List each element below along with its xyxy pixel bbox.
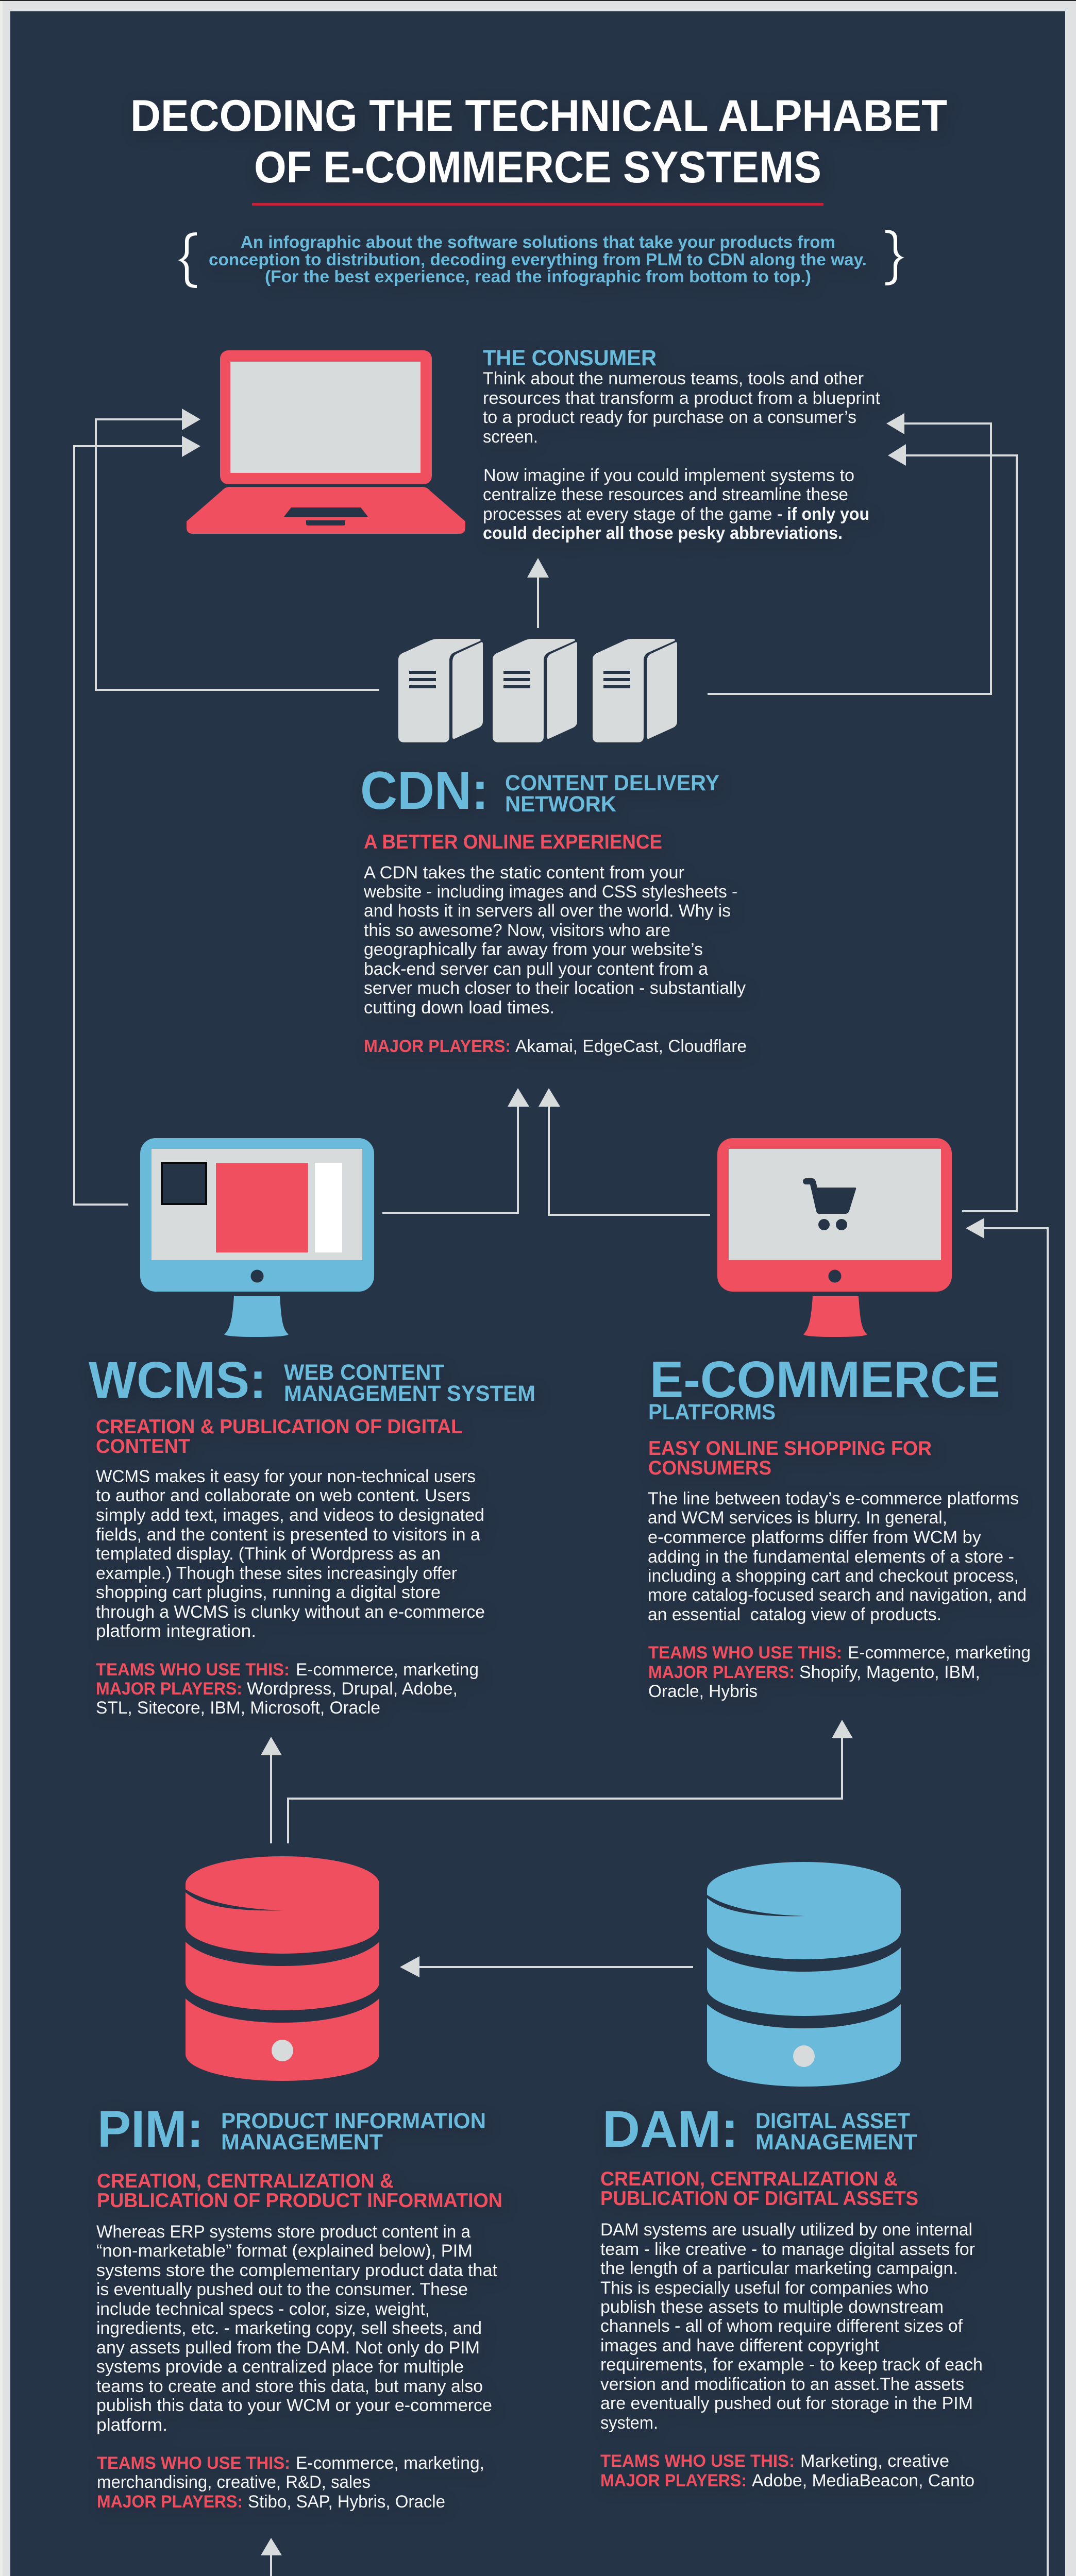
e-commerce body text: more catalog-focused search and navigation, and bbox=[648, 1585, 1027, 1605]
pim teams and players: merchandising, creative, R&D, sales bbox=[97, 2472, 371, 2492]
wcms body text: to author and collaborate on web content. Users bbox=[96, 1486, 470, 1505]
cdn body text: back-end server can pull your content from a bbox=[364, 959, 708, 979]
wcms body text bbox=[96, 1467, 485, 1641]
title bbox=[130, 91, 947, 192]
wcms body text: through a WCMS is clunky without an e-commerce bbox=[96, 1602, 485, 1622]
wcms teams and players: TEAMS WHO USE THIS: bbox=[96, 1660, 290, 1680]
arrow: wcms to cdn bbox=[382, 1088, 529, 1213]
dam body text: system. bbox=[600, 2413, 658, 2433]
intro text with braces bbox=[178, 230, 904, 288]
subheading: wcms: CREATION & PUBLICATION OF DIGITAL bbox=[96, 1416, 463, 1438]
heading: pim: MANAGEMENT bbox=[221, 2130, 383, 2155]
server 3 bbox=[593, 639, 677, 742]
e-commerce teams and players: E-commerce, marketing bbox=[848, 1643, 1031, 1663]
consumer body text: could decipher all those pesky abbreviations. bbox=[483, 523, 843, 543]
subheading: dam: CREATION, CENTRALIZATION & bbox=[600, 2168, 898, 2190]
cdn body text: this so awesome? Now, visitors who are bbox=[364, 921, 670, 940]
consumer body text: Think about the numerous teams, tools and other bbox=[483, 369, 864, 388]
arrow: pim to wcms bbox=[261, 1737, 282, 1843]
consumer body text: resources that transform a product from a blueprint bbox=[483, 388, 881, 408]
heading: pim: PIM: bbox=[97, 2100, 204, 2158]
heading: e-commerce platforms: E-COMMERCE bbox=[650, 1351, 1000, 1409]
heading: wcms bbox=[89, 1351, 535, 1409]
arrow: erp to e-commerce bbox=[648, 1218, 1048, 2576]
heading: pim: PRODUCT INFORMATION bbox=[221, 2109, 486, 2133]
pim teams and players: Stibo, SAP, Hybris, Oracle bbox=[248, 2492, 445, 2512]
e-commerce teams and players: TEAMS WHO USE THIS: bbox=[648, 1643, 842, 1663]
arrow: e-commerce to cdn bbox=[539, 1088, 710, 1215]
subheading: dam bbox=[600, 2168, 918, 2210]
panel: dam bbox=[600, 2100, 983, 2490]
dam body text: team - like creative - to manage digital assets for bbox=[600, 2240, 975, 2259]
pim body text: any assets pulled from the DAM. Not only do PIM bbox=[96, 2338, 480, 2358]
heading: the consumer: THE CONSUMER bbox=[483, 346, 657, 370]
heading: dam bbox=[602, 2100, 917, 2158]
server 1 bbox=[398, 639, 483, 742]
dam body text: DAM systems are usually utilized by one internal bbox=[600, 2220, 972, 2240]
subheading: dam: PUBLICATION OF DIGITAL ASSETS bbox=[600, 2188, 918, 2210]
e-commerce body text: The line between today’s e-commerce platforms bbox=[648, 1489, 1019, 1509]
dam body text: images and have different copyright bbox=[600, 2336, 880, 2355]
icon: laptop bbox=[187, 350, 465, 534]
dam body text: This is especially useful for companies who bbox=[600, 2278, 929, 2298]
dam teams and players: MAJOR PLAYERS: bbox=[600, 2471, 747, 2490]
panel: pim bbox=[96, 2100, 502, 2512]
intro copy: conception to distribution, decoding everything from PLM to CDN along the way. bbox=[209, 250, 867, 269]
pim teams and players: TEAMS WHO USE THIS: bbox=[97, 2453, 290, 2473]
heading: pim bbox=[97, 2100, 486, 2158]
wcms teams and players: E-commerce, marketing bbox=[296, 1660, 479, 1680]
cdn body text: A CDN takes the static content from your bbox=[364, 863, 684, 883]
server 2 bbox=[493, 639, 577, 742]
arrow: pim to e-commerce bbox=[288, 1720, 853, 1843]
dam body text bbox=[600, 2220, 983, 2433]
title: DECODING THE TECHNICAL ALPHABET bbox=[130, 91, 947, 141]
icon: left brace bbox=[178, 232, 197, 288]
consumer body text: processes at every stage of the game - bbox=[483, 504, 783, 524]
panel: e-commerce platforms bbox=[648, 1351, 1031, 1701]
pim body text: Whereas ERP systems store product content in a bbox=[96, 2222, 470, 2242]
pim body text: systems store the complementary product data that bbox=[96, 2261, 498, 2280]
e-commerce body text bbox=[648, 1489, 1027, 1624]
pim teams and players bbox=[97, 2453, 484, 2512]
dam body text: version and modification to an asset.The assets bbox=[600, 2375, 964, 2394]
e-commerce teams and players: MAJOR PLAYERS: bbox=[648, 1663, 795, 1682]
subheading: pim: CREATION, CENTRALIZATION & bbox=[97, 2170, 394, 2192]
icon: e-commerce monitor with cart bbox=[717, 1138, 952, 1337]
subheading: e-commerce: CONSUMERS bbox=[648, 1457, 771, 1479]
subheading: wcms: CONTENT bbox=[96, 1435, 190, 1458]
title underline bbox=[252, 203, 823, 206]
cdn body text bbox=[363, 863, 746, 1018]
consumer body text: if only you bbox=[787, 504, 869, 524]
cdn body text: website - including images and CSS stylesheets - bbox=[363, 882, 737, 902]
wcms body text: fields, and the content is presented to visitors in a bbox=[96, 1525, 480, 1545]
panel: the consumer bbox=[483, 346, 881, 543]
consumer body text: centralize these resources and streamline these bbox=[483, 485, 848, 504]
cdn body text: geographically far away from your website’s bbox=[364, 940, 703, 959]
subheading: e-commerce: EASY ONLINE SHOPPING FOR bbox=[648, 1437, 932, 1460]
cdn major players: MAJOR PLAYERS: bbox=[364, 1037, 511, 1056]
heading: dam: MANAGEMENT bbox=[755, 2130, 917, 2155]
heading: cdn: NETWORK bbox=[505, 792, 616, 817]
dam body text: publish these assets to multiple downstream bbox=[600, 2297, 944, 2317]
wcms teams and players: MAJOR PLAYERS: bbox=[96, 1679, 242, 1699]
wcms body text: templated display. (Think of Wordpress as an bbox=[96, 1544, 441, 1564]
icon: three cdn servers bbox=[398, 639, 677, 742]
pim body text: systems provide a centralized place for multiple bbox=[96, 2357, 464, 2377]
wcms body text: simply add text, images, and videos to designated bbox=[96, 1505, 484, 1525]
pim body text: teams to create and store this data, but many also bbox=[96, 2377, 483, 2396]
consumer body text: to a product ready for purchase on a consumer’s bbox=[483, 408, 856, 427]
e-commerce body text: including a shopping cart and checkout process, bbox=[648, 1566, 1019, 1586]
title: OF E-COMMERCE SYSTEMS bbox=[254, 143, 821, 192]
consumer body text bbox=[483, 369, 881, 543]
consumer body text: Now imagine if you could implement systems to bbox=[483, 466, 854, 485]
heading: cdn bbox=[360, 761, 719, 821]
arrow: dam to pim bbox=[400, 1956, 693, 1977]
pim body text: “non-marketable” format (explained below), PIM bbox=[96, 2241, 473, 2261]
dam teams and players: Adobe, MediaBeacon, Canto bbox=[752, 2471, 974, 2490]
cdn major players bbox=[364, 1037, 747, 1056]
arrow: cdn to consumer (upper right) bbox=[708, 413, 991, 694]
icon: shopping cart bbox=[803, 1178, 856, 1230]
wcms body text: example.) Though these sites increasingly offer bbox=[96, 1564, 457, 1583]
wcms teams and players bbox=[96, 1660, 479, 1718]
e-commerce body text: and WCM services is blurry. In general, bbox=[648, 1508, 947, 1528]
icon: wcms monitor bbox=[140, 1138, 374, 1337]
dam teams and players: Marketing, creative bbox=[800, 2451, 949, 2471]
subheading: cdn: A BETTER ONLINE EXPERIENCE bbox=[364, 831, 662, 853]
cdn body text: server much closer to their location - substantially bbox=[364, 978, 746, 998]
wcms body text: shopping cart plugins, running a digital store bbox=[96, 1583, 441, 1602]
pim body text: include technical specs - color, size, weight, bbox=[96, 2299, 430, 2319]
icon: pim database bbox=[186, 1856, 379, 2081]
wcms body text: platform integration. bbox=[96, 1621, 256, 1641]
dam body text: channels - all of whom require different sizes of bbox=[600, 2316, 963, 2336]
dam teams and players bbox=[600, 2451, 974, 2490]
cdn body text: cutting down load times. bbox=[364, 998, 554, 1018]
arrow: erp to pim bbox=[261, 2538, 543, 2576]
subheading: e-commerce bbox=[648, 1437, 932, 1479]
arrow: e-commerce to consumer (lower right) bbox=[888, 444, 1017, 1211]
e-commerce body text: e-commerce platforms differ from WCM by bbox=[648, 1528, 981, 1547]
e-commerce teams and players: Shopify, Magento, IBM, bbox=[799, 1663, 980, 1682]
cdn body text: and hosts it in servers all over the world. Why is bbox=[364, 901, 731, 921]
heading: cdn: CDN: bbox=[360, 761, 489, 821]
consumer body text: screen. bbox=[483, 427, 538, 447]
dam body text: are eventually pushed out for storage in the PIM bbox=[600, 2394, 973, 2413]
icon: dam database bbox=[707, 1862, 901, 2087]
e-commerce teams and players bbox=[648, 1643, 1031, 1701]
pim body text: platform. bbox=[96, 2415, 167, 2435]
intro copy: An infographic about the software solutions that take your products from bbox=[241, 232, 835, 251]
intro copy bbox=[209, 232, 867, 286]
arrow: cdn to consumer (upper left) bbox=[96, 409, 379, 690]
pim body text bbox=[96, 2222, 498, 2435]
intro copy: (For the best experience, read the infographic from bottom to top.) bbox=[265, 267, 811, 286]
pim body text: ingredients, etc. - marketing copy, sell sheets, and bbox=[96, 2318, 482, 2338]
panel: cdn bbox=[360, 761, 747, 1056]
heading: wcms: MANAGEMENT SYSTEM bbox=[284, 1381, 535, 1406]
subheading: pim bbox=[97, 2170, 502, 2212]
panel: wcms bbox=[89, 1351, 535, 1718]
e-commerce body text: adding in the fundamental elements of a store - bbox=[648, 1547, 1014, 1567]
dam body text: the length of a particular marketing campaign. bbox=[600, 2259, 958, 2278]
arrow: cdn up to consumer bbox=[527, 558, 549, 628]
pim body text: publish this data to your WCM or your e-commerce bbox=[96, 2396, 492, 2415]
arrow: wcms to consumer (lower left) bbox=[74, 436, 200, 1205]
e-commerce teams and players: Oracle, Hybris bbox=[648, 1682, 758, 1701]
heading: dam: DIGITAL ASSET bbox=[755, 2109, 910, 2133]
pim body text: is eventually pushed out to the consumer. These bbox=[96, 2280, 468, 2299]
pim teams and players: E-commerce, marketing, bbox=[296, 2453, 484, 2473]
wcms body text: WCMS makes it easy for your non-technical users bbox=[96, 1467, 476, 1486]
subheading: pim: PUBLICATION OF PRODUCT INFORMATION bbox=[97, 2190, 502, 2212]
pim teams and players: MAJOR PLAYERS: bbox=[97, 2492, 243, 2512]
heading: cdn: CONTENT DELIVERY bbox=[505, 771, 719, 795]
heading: wcms: WEB CONTENT bbox=[284, 1360, 444, 1385]
heading: e-commerce platforms: PLATFORMS bbox=[648, 1400, 776, 1425]
heading: dam: DAM: bbox=[602, 2100, 738, 2158]
e-commerce body text: an essential catalog view of products. bbox=[648, 1605, 942, 1624]
icon: right brace bbox=[885, 230, 904, 285]
dam body text: requirements, for example - to keep track of each bbox=[600, 2355, 983, 2375]
dam teams and players: TEAMS WHO USE THIS: bbox=[600, 2451, 795, 2471]
wcms teams and players: STL, Sitecore, IBM, Microsoft, Oracle bbox=[96, 1698, 380, 1718]
heading: wcms: WCMS: bbox=[89, 1351, 266, 1409]
subheading: wcms bbox=[96, 1416, 463, 1458]
cdn major players: Akamai, EdgeCast, Cloudflare bbox=[515, 1037, 747, 1056]
wcms teams and players: Wordpress, Drupal, Adobe, bbox=[247, 1679, 458, 1699]
